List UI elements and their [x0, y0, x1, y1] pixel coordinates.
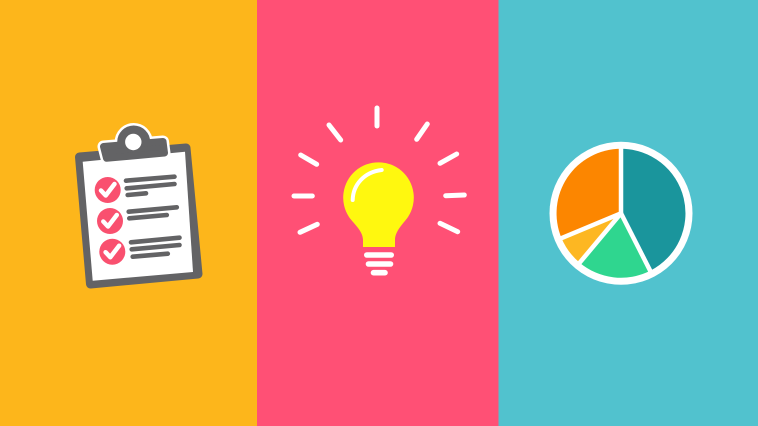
- checklist item 1: [95, 177, 174, 203]
- panel: pink background: [257, 0, 498, 426]
- pie outer ring: [550, 142, 692, 285]
- panel: teal background: [498, 0, 758, 426]
- bulb glass: [343, 162, 414, 247]
- checklist item 3: [99, 238, 180, 265]
- slice: green: [580, 213, 650, 278]
- slice: orange: [557, 149, 621, 238]
- clipboard clip: [104, 126, 164, 158]
- clipboard board: [80, 148, 198, 284]
- bulb base: [367, 255, 391, 273]
- slice: yellow: [562, 213, 621, 263]
- pie chart: [550, 142, 692, 285]
- clipboard paper: [83, 152, 193, 281]
- slice: teal: [621, 149, 685, 271]
- icon: light bulb: [294, 108, 464, 273]
- icon: clipboard checklist: [80, 126, 198, 284]
- panel: amber background: [0, 0, 257, 426]
- bulb highlight: [353, 170, 382, 200]
- pie separators: [559, 145, 652, 273]
- bulb rays: [294, 108, 464, 232]
- checklist item 2: [97, 207, 177, 234]
